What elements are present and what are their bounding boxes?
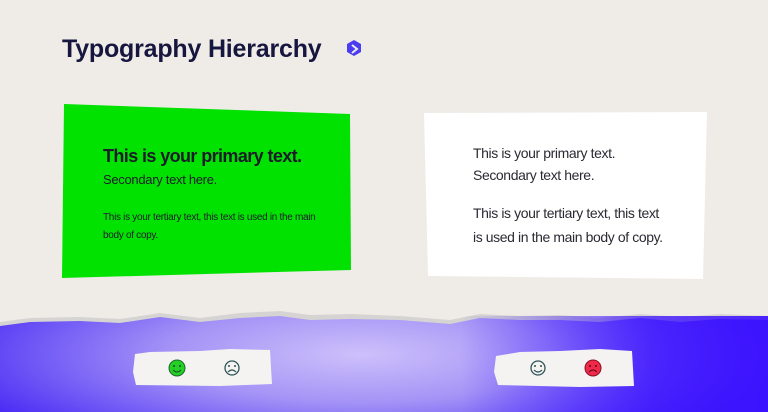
rating strip: right: [494, 349, 634, 387]
primary text: This is your primary text.: [473, 145, 615, 161]
panel: green card: body of copy.: [103, 230, 158, 241]
rating strip: left: [133, 349, 272, 386]
secondary text: Secondary text here.: [473, 167, 594, 183]
secondary text: Secondary text here.: [103, 172, 217, 187]
blue torn bottom area: [0, 311, 768, 412]
tertiary text: This is your tertiary text, this text is used in the main: [103, 212, 315, 223]
title: Typography Hierarchy: [62, 35, 322, 63]
icon: logo: [347, 40, 361, 56]
icon: happy green: [169, 360, 185, 376]
panel: green card: [62, 104, 351, 278]
panel: white card: is used in the main body of copy.: [473, 229, 663, 245]
icon: happy: [531, 361, 545, 375]
primary text: This is your primary text.: [103, 146, 301, 166]
panel: white card: [424, 112, 707, 279]
icon: sad red: [585, 360, 601, 376]
tertiary text: This is your tertiary text, this text: [473, 205, 659, 221]
icon: sad: [225, 361, 239, 375]
